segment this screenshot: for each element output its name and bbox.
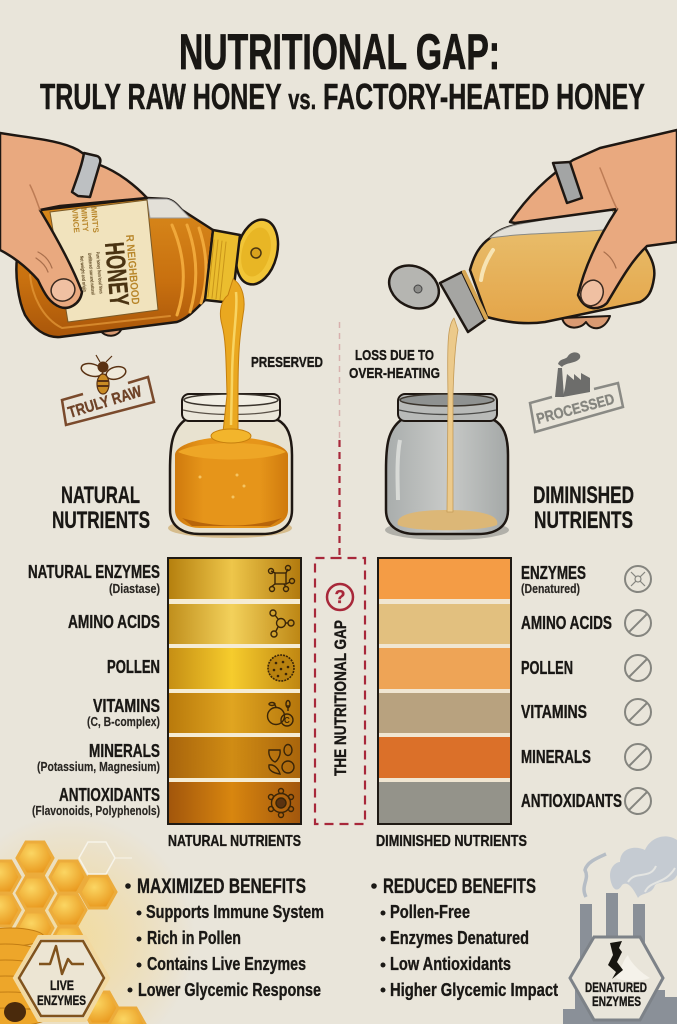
icon: enzyme molecule — [268, 566, 294, 592]
labels: natural nutrients list: ANTIOXIDANTS — [59, 785, 160, 805]
label: loss due to over-heating: OVER-HEATING — [349, 365, 440, 382]
list: reduced benefits: Enzymes Denatured — [390, 927, 529, 948]
list: reduced benefits: Pollen-Free — [390, 901, 470, 922]
labels: diminished nutrients list: POLLEN — [521, 658, 573, 678]
labels: natural nutrients list: NATURAL ENZYMES — [28, 562, 160, 582]
caption: diminished nutrients: DIMINISHED NUTRIENTS — [376, 833, 527, 850]
icon: raw honey bottle poured by hand: HONEY — [99, 241, 134, 307]
labels: diminished nutrients list: ANTIOXIDANTS — [521, 791, 622, 811]
icon: truly raw jar with honey stream — [168, 279, 292, 538]
heading: natural nutrients — [52, 482, 150, 534]
icon: raw honey bottle poured by hand: MINT'S — [89, 206, 100, 234]
icon: processed honey bottle poured by hand — [382, 130, 677, 332]
heading: natural nutrients: NATURAL — [61, 482, 140, 509]
labels: natural nutrients list: VITAMINS — [93, 696, 160, 716]
caption: natural nutrients: NATURAL NUTRIENTS — [168, 833, 301, 850]
icon: vitamin fruit — [268, 700, 293, 726]
icon: raw honey bottle poured by hand: R NEIGHBOOD — [123, 234, 141, 305]
labels: diminished nutrients list: AMINO ACIDS — [521, 613, 612, 633]
labels: diminished nutrients list: VITAMINS — [521, 702, 587, 722]
labels: natural nutrients list: (C, B-complex) — [87, 715, 160, 729]
badge: denatured enzymes — [570, 937, 663, 1020]
list: reduced benefits: Low Antioxidants — [390, 953, 511, 974]
labels: natural nutrients list: MINERALS — [89, 741, 160, 761]
labels: natural nutrients list: (Diastase) — [109, 582, 160, 596]
chart: diminished nutrient bars — [377, 557, 512, 825]
chart: natural nutrient bars — [167, 557, 302, 825]
labels: diminished nutrients list: MINERALS — [521, 747, 591, 767]
heading: diminished nutrients: DIMINISHED — [533, 482, 634, 509]
stamp: truly raw with bee: TRULY RAW — [66, 383, 145, 422]
stamp: processed with factory: PROCESSED — [535, 391, 616, 428]
labels: natural nutrients list: (Flavonoids, Polyphenols) — [32, 804, 160, 818]
icon: processed empty jar with thin stream — [385, 318, 509, 540]
badge: live enzymes: LIVE — [50, 977, 74, 993]
list: maximized benefits: Lower Glycemic Response — [138, 979, 321, 1000]
labels: diminished nutrients list: ENZYMES — [521, 563, 586, 583]
icon: raw honey bottle poured by hand: Pure honey from local hives — [94, 252, 104, 294]
heading: diminished nutrients — [533, 482, 634, 534]
labels: diminished nutrients list: (Denatured) — [521, 582, 580, 596]
panel: nutrient gap connector: ? — [334, 587, 346, 607]
badge: live enzymes — [15, 937, 108, 1020]
title — [40, 24, 645, 117]
label: loss due to over-heating: LOSS DUE TO — [355, 347, 434, 364]
label: loss due to over-heating — [349, 347, 440, 382]
icon: pollen grain — [268, 655, 294, 681]
panel: nutrient gap connector — [315, 322, 365, 824]
badge: denatured enzymes: DENATURED — [585, 979, 647, 995]
list: maximized benefits: Rich in Pollen — [147, 927, 241, 948]
icon: raw honey bottle poured by hand — [0, 133, 284, 337]
labels: natural nutrients list — [28, 562, 160, 818]
list: maximized benefits: Contains Live Enzymes — [147, 953, 306, 974]
badge: live enzymes: ENZYMES — [37, 992, 86, 1008]
labels: natural nutrients list: (Potassium, Magnesium) — [37, 760, 160, 774]
label: preserved: PRESERVED — [251, 354, 323, 371]
icon: raw honey bottle poured by hand: Net weight and origin — [78, 256, 87, 292]
title: NUTRITIONAL GAP: — [179, 24, 500, 80]
stamp: truly raw with bee — [62, 355, 154, 425]
icon: antioxidant ring — [268, 788, 294, 818]
list: maximized benefits — [125, 875, 324, 1000]
list: maximized benefits: MAXIMIZED BENEFITS — [137, 875, 306, 898]
labels: natural nutrients list: POLLEN — [107, 657, 160, 677]
icon: mineral foods — [269, 744, 294, 774]
icon: vitamin fruit: C — [284, 716, 290, 725]
icon: amino acid molecule — [270, 610, 294, 637]
labels: diminished nutrients list — [521, 563, 622, 811]
labels: natural nutrients list: AMINO ACIDS — [68, 612, 160, 632]
icons: absent nutrient markers — [625, 566, 651, 814]
illustration: honeycomb and hive — [0, 815, 195, 1024]
list: reduced benefits: REDUCED BENEFITS — [383, 875, 536, 898]
list: reduced benefits: Higher Glycemic Impact — [390, 979, 558, 1000]
icon: raw honey bottle poured by hand: MINTY — [79, 207, 90, 233]
stamp: processed with factory — [530, 352, 623, 432]
heading: natural nutrients: NUTRIENTS — [52, 507, 150, 534]
panel: nutrient gap connector: THE NUTRITIONAL GAP — [331, 620, 350, 776]
badge: denatured enzymes: ENZYMES — [592, 993, 641, 1009]
illustration: factory and smoke — [563, 836, 677, 1024]
icon: raw honey bottle poured by hand: Unfiltered raw and natural — [86, 253, 96, 295]
heading: diminished nutrients: NUTRIENTS — [534, 507, 633, 534]
list: maximized benefits: Supports Immune System — [146, 901, 324, 922]
list: reduced benefits — [371, 875, 558, 1000]
icon: raw honey bottle poured by hand: VINCE — [70, 208, 81, 234]
